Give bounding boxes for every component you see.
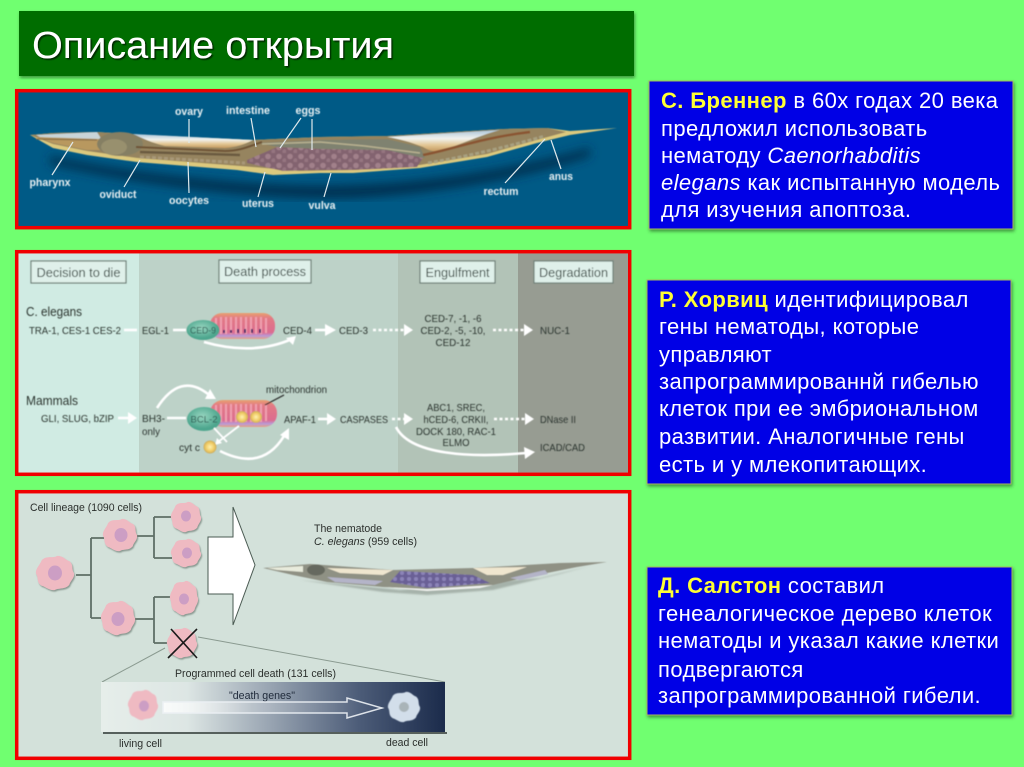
text box: Sulston: генеалогическое дерево клеток bbox=[658, 601, 992, 626]
dead cell cross bbox=[168, 629, 197, 658]
row: C. elegans: CED-9 bbox=[190, 326, 216, 336]
text box: Sulston: запрограммированной гибели. bbox=[658, 683, 981, 708]
lineage tree bbox=[76, 517, 172, 643]
title banner bbox=[19, 11, 634, 76]
row: Mammals: cyt c bbox=[179, 442, 200, 454]
row: Mammals: ICAD/CAD bbox=[540, 442, 585, 454]
panel: apoptosis pathway bbox=[17, 252, 630, 474]
text box: Horvitz: Р. Хорвиц идентифицировал bbox=[659, 287, 969, 312]
text box: Brenner: С. Бреннер в 60х годах 20 века bbox=[661, 88, 999, 113]
zoom lines bbox=[102, 637, 445, 682]
text box: Horvitz: есть и у млекопитающих. bbox=[659, 452, 927, 477]
worm illustration bbox=[30, 128, 617, 198]
anatomy labels: pharynx bbox=[30, 177, 71, 189]
anatomy callout lines bbox=[52, 118, 561, 197]
dead cell label: dead cell bbox=[386, 737, 428, 749]
worm label: C. elegans (959 cells) bbox=[314, 536, 417, 548]
row: Mammals: GLI, SLUG, bZIP bbox=[41, 413, 114, 425]
title: Описание открытия bbox=[32, 25, 394, 67]
anatomy labels: intestine bbox=[226, 105, 270, 117]
living cell label: living cell bbox=[119, 738, 162, 750]
stage headers: Degradation bbox=[539, 265, 608, 280]
anatomy labels: oviduct bbox=[100, 189, 137, 201]
row: Mammals: DNase II bbox=[540, 414, 576, 426]
row: C. elegans: CED-4 bbox=[283, 325, 312, 337]
living cell bbox=[128, 690, 158, 720]
anatomy labels: uterus bbox=[242, 198, 274, 210]
row: C. elegans: EGL-1 bbox=[142, 325, 169, 337]
transition arrow bbox=[163, 698, 382, 718]
text box: Horvitz: управляют bbox=[659, 342, 772, 367]
row: Mammals: only bbox=[142, 426, 161, 438]
row: C. elegans bbox=[26, 305, 570, 349]
text box: Horvitz: запрограммированнй гибелью bbox=[659, 369, 979, 394]
text box: Brenner bbox=[649, 81, 1013, 229]
text box: Sulston bbox=[647, 567, 1012, 715]
gradient box: living to dead bbox=[101, 682, 447, 734]
row: Mammals: BH3- bbox=[142, 413, 165, 425]
nematode illustration bbox=[263, 562, 607, 595]
row: Mammals: mitochondrion bbox=[266, 384, 327, 396]
dead cell bbox=[388, 692, 420, 722]
text box: Brenner: для изучения апоптоза. bbox=[661, 197, 911, 222]
stage headers: Engulfment bbox=[426, 265, 490, 280]
text box: Brenner: предложил использовать bbox=[661, 116, 928, 141]
programmed death label: Programmed cell death (131 cells) bbox=[175, 668, 336, 680]
row: C. elegans: TRA-1, CES-1 CES-2 bbox=[29, 325, 121, 337]
stage headers bbox=[31, 260, 613, 283]
row: Mammals: Mammals bbox=[26, 394, 78, 408]
lineage heading: Cell lineage (1090 cells) bbox=[30, 502, 142, 514]
anatomy labels: oocytes bbox=[169, 195, 209, 207]
text box: Sulston: нематоды и указал какие клетки bbox=[658, 628, 999, 653]
anatomy labels: ovary bbox=[175, 106, 204, 118]
stage headers: Death process bbox=[224, 264, 306, 279]
anatomy labels: eggs bbox=[296, 105, 320, 117]
mitochondrion bbox=[210, 400, 277, 427]
anatomy labels bbox=[30, 105, 573, 212]
anatomy labels: anus bbox=[549, 171, 573, 183]
worm label: The nematode bbox=[314, 523, 382, 535]
row: Mammals bbox=[26, 384, 585, 459]
row: C. elegans: CED-7, -1, -6 bbox=[424, 313, 482, 325]
text box: Sulston: Д. Салстон составил bbox=[658, 573, 884, 598]
row: C. elegans: CED-12 bbox=[436, 337, 471, 349]
row: C. elegans: NUC-1 bbox=[540, 325, 570, 337]
row: Mammals: ELMO bbox=[442, 437, 470, 449]
text box: Horvitz: гены нематоды, которые bbox=[659, 314, 919, 339]
pathway stage columns bbox=[18, 254, 628, 472]
worm label bbox=[314, 523, 417, 548]
text box: Horvitz: клеток при ее эмбриональном bbox=[659, 396, 979, 421]
row: Mammals: CASPASES bbox=[340, 414, 388, 426]
row: Mammals: ABC1, SREC, bbox=[427, 402, 485, 414]
mitochondrion bbox=[210, 313, 275, 339]
text box: Sulston: подвергаются bbox=[658, 657, 804, 682]
panel: cell lineage bbox=[17, 492, 630, 758]
text box: Brenner: нематоду Caenorhabditis bbox=[661, 143, 921, 168]
anatomy labels: rectum bbox=[484, 186, 519, 198]
row: C. elegans: CED-2, -5, -10, bbox=[420, 325, 486, 337]
text box: Brenner: elegans как испытанную модель bbox=[661, 170, 1000, 195]
row: Mammals: hCED-6, CRKII, bbox=[424, 414, 488, 426]
row: Mammals: DOCK 180, RAC-1 bbox=[416, 426, 496, 438]
text box: Horvitz: развитии. Аналогичные гены bbox=[659, 424, 965, 449]
row: Mammals: BCL-2 bbox=[190, 414, 218, 426]
text box: Horvitz bbox=[647, 280, 1011, 484]
stage headers: Decision to die bbox=[36, 265, 120, 280]
anatomy labels: vulva bbox=[308, 200, 336, 212]
row: C. elegans: CED-3 bbox=[339, 325, 368, 337]
panel: nematode anatomy bbox=[17, 91, 630, 228]
big arrow bbox=[208, 507, 255, 625]
cells bbox=[36, 502, 201, 658]
death genes label: "death genes" bbox=[229, 690, 295, 702]
row: Mammals: APAF-1 bbox=[284, 414, 316, 426]
row: C. elegans: C. elegans bbox=[26, 305, 82, 319]
